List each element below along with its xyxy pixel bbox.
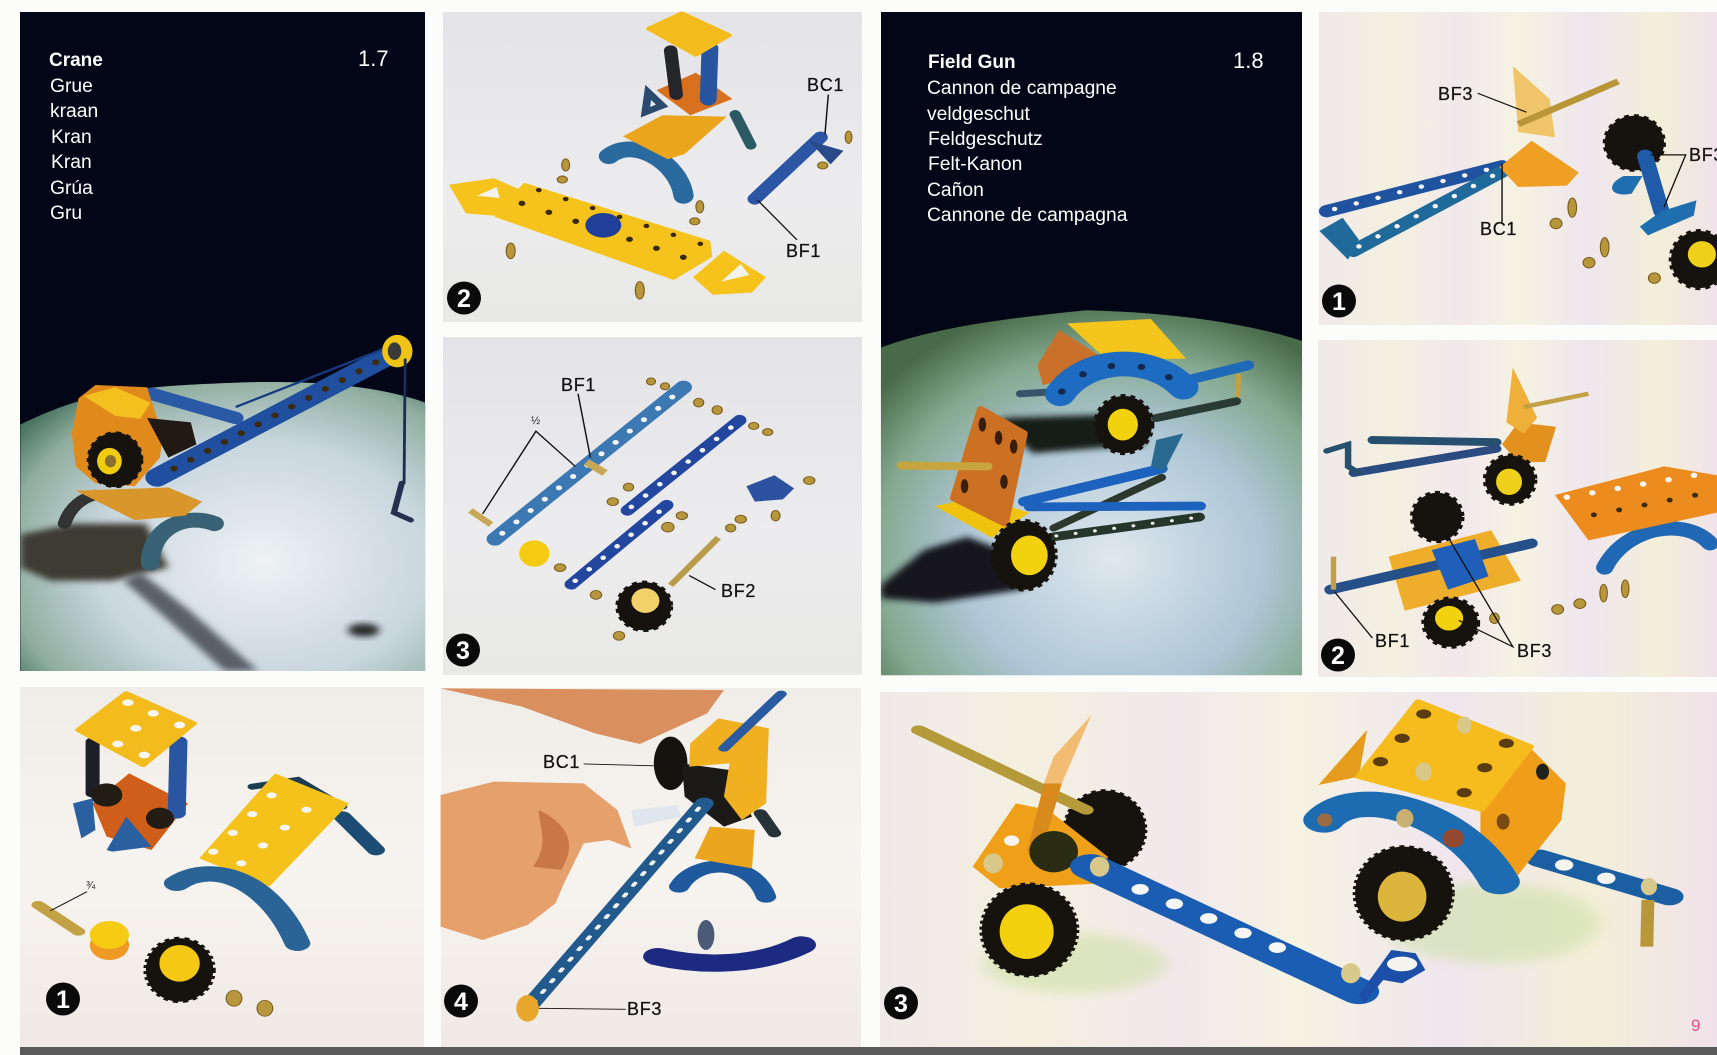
label BF3: BF3	[627, 999, 662, 1019]
step 2 parts	[1326, 367, 1717, 647]
step badge 2	[1321, 638, 1355, 672]
label BC1: BC1	[807, 75, 844, 95]
step 1 parts	[38, 693, 376, 1016]
fraction label one half: ½	[531, 415, 540, 427]
fraction label three quarters: ¾	[86, 880, 96, 892]
panel: crane title and finished model	[20, 12, 425, 671]
title: Field Gun: Field Gun	[928, 52, 1016, 73]
panel: crane step 3	[443, 337, 862, 675]
panel: field gun title and finished model	[881, 12, 1302, 675]
step badge 3: 3	[456, 637, 470, 665]
field gun photo	[881, 310, 1302, 675]
step 3 photo	[919, 702, 1669, 1003]
panel: crane step 4	[441, 688, 861, 1047]
label BF1: BF1	[1375, 631, 1410, 651]
label BF1: BF1	[561, 375, 596, 395]
step badge 1	[1322, 284, 1356, 318]
step badge 2: 2	[1331, 642, 1345, 670]
model number 1.8: 1.8	[1233, 48, 1264, 73]
translated names: Cannon de campagne	[927, 78, 1117, 99]
page number 9: 9	[1691, 1016, 1700, 1035]
step badge 1: 1	[1332, 288, 1346, 316]
translated names	[50, 76, 98, 224]
panel: crane step 1	[20, 687, 424, 1047]
translated names: Kran	[51, 152, 92, 173]
step badge 4: 4	[454, 988, 468, 1016]
step badge 3	[446, 634, 480, 666]
label BC1: BC1	[1480, 219, 1517, 239]
label BF3: BF3	[1438, 84, 1473, 104]
step badge 1	[46, 982, 80, 1016]
panel: field gun step 1	[1319, 12, 1717, 325]
step 4 photo	[441, 688, 801, 1022]
step badge 4	[444, 984, 478, 1018]
step badge 1: 1	[56, 986, 70, 1014]
translated names: Grúa	[50, 178, 93, 199]
translated names: Felt-Kanon	[928, 154, 1022, 175]
step badge 3: 3	[894, 990, 908, 1018]
crane photo	[20, 335, 425, 671]
translated names	[927, 78, 1128, 226]
translated names: Cañon	[927, 180, 984, 201]
label BF3: BF3	[1517, 641, 1552, 661]
translated names: Gru	[50, 203, 82, 224]
step badge 2	[447, 282, 481, 314]
label BF1: BF1	[786, 241, 821, 261]
step 1 parts	[1319, 66, 1717, 288]
title: Crane: Crane	[49, 50, 103, 71]
panel: field gun step 2	[1318, 340, 1717, 677]
panel: crane step 2	[443, 12, 862, 322]
page bottom edge strip	[20, 1047, 1717, 1055]
panel: field gun step 3	[880, 692, 1717, 1047]
translated names: Kran	[51, 127, 92, 148]
label BF2: BF2	[721, 581, 756, 601]
translated names: veldgeschut	[927, 104, 1031, 125]
translated names: Grue	[50, 76, 93, 97]
model number 1.7: 1.7	[358, 46, 389, 71]
step 3 parts	[470, 378, 815, 640]
step 2 parts	[449, 13, 852, 299]
translated names: Feldgeschutz	[928, 129, 1043, 150]
step badge 3	[884, 986, 918, 1020]
translated names: kraan	[50, 101, 98, 122]
translated names: Cannone de campagna	[927, 205, 1128, 226]
step badge 2: 2	[457, 285, 471, 313]
label BC1: BC1	[543, 752, 580, 772]
